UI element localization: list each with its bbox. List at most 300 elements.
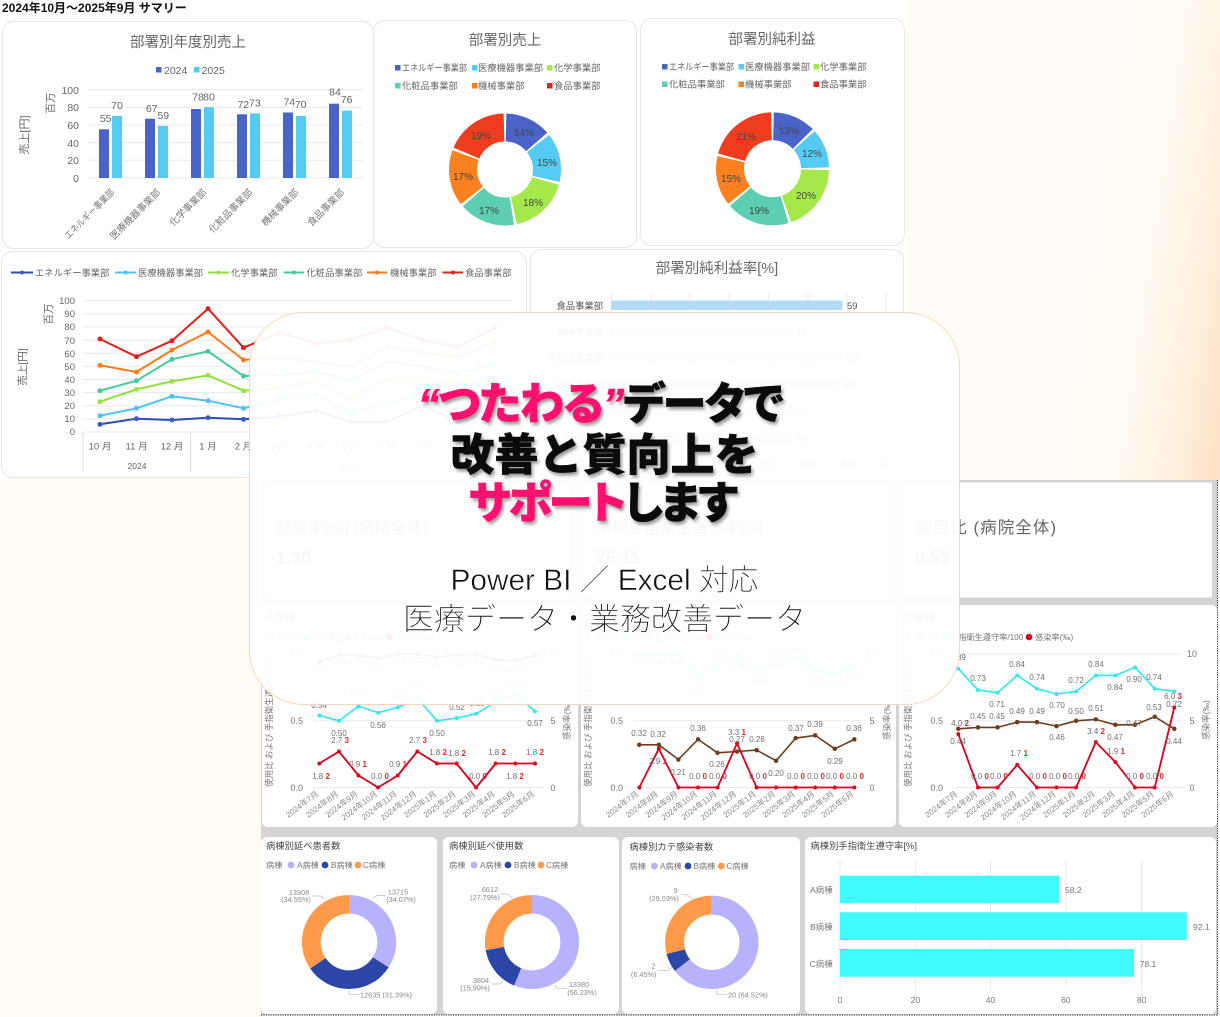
data labels: ward B: 0.0 0 xyxy=(749,772,767,781)
category labels: 化粧品事業部 xyxy=(206,186,255,235)
legend: ward C: 使用比 xyxy=(916,632,941,642)
gridlines and axis labels xyxy=(16,296,513,472)
x axis labels xyxy=(609,459,891,470)
gridlines and axis labels: 100 xyxy=(61,85,79,97)
legend: years: 2024 xyxy=(164,65,188,77)
bar category labels: エネルギー事業部 xyxy=(538,432,603,443)
x labels: ward A: 2025年4月 xyxy=(460,789,497,820)
data labels: ward B: 0.78 xyxy=(729,663,745,672)
data labels: ward B: 0.0 0 xyxy=(826,772,844,781)
data labels: ward B: 0.91 xyxy=(710,653,726,662)
bar value labels: 59 xyxy=(847,301,858,312)
x labels: ward C: 2025年6月 xyxy=(1139,789,1176,820)
heading: net profit rate: 部署別純利益率[%] xyxy=(656,260,778,277)
x labels: ward A: 2024年12月 xyxy=(378,789,419,822)
data labels: ward B: 0.20 xyxy=(768,769,784,778)
bar values: 73 xyxy=(249,98,261,110)
background: peach gradient top-right xyxy=(906,0,1220,480)
axes: ward A: 1.0 xyxy=(290,649,303,659)
month and year labels xyxy=(89,442,503,471)
x labels: ward B: 2025年2月 xyxy=(741,789,777,820)
data labels: ward A: 0.9 1 xyxy=(349,760,367,769)
donut percent labels: profit: 12% xyxy=(802,149,822,160)
bar value labels: 58 xyxy=(843,380,854,391)
legend: line series: 機械事業部 xyxy=(390,267,436,278)
data labels: ward C: 0.84 xyxy=(1088,660,1104,669)
donut percent labels: sales: 15% xyxy=(537,158,557,169)
data labels: ward B: 0.32 xyxy=(650,730,666,739)
legend: wards: C病棟 xyxy=(726,861,749,871)
x labels: ward A: 2024年9月 xyxy=(323,789,360,820)
category labels xyxy=(62,186,347,242)
data labels: ward B: 0.36 xyxy=(690,724,706,733)
donut percent labels: sales: 17% xyxy=(453,172,473,183)
x axis labels: 40 xyxy=(986,995,995,1005)
data labels: ward A: 0.52 xyxy=(449,703,465,712)
donut percent labels: profit: 13% xyxy=(779,126,799,137)
legend: wards: A病棟 xyxy=(297,860,319,870)
data labels: ward C: 0.0 0 xyxy=(971,772,989,781)
legend: ward A: 感染率(‰) xyxy=(396,632,434,642)
donut percent labels: profit: 20% xyxy=(796,191,816,202)
axes: ward C: 5 xyxy=(1189,716,1195,726)
panel: yearly sales bar chart xyxy=(2,22,374,248)
category labels: 医療機器事業部 xyxy=(108,186,163,242)
x labels: ward A: 2025年6月 xyxy=(500,789,536,820)
heading: usage days: 病棟別延べ使用数 xyxy=(449,840,523,851)
heading: ward C: C病棟 xyxy=(905,610,935,624)
data labels: ward A: 0.95 xyxy=(488,666,504,675)
bar labels: B病棟 xyxy=(810,922,833,932)
axes: ward B: 1.0 xyxy=(610,649,623,659)
data labels: ward C: 0.73 xyxy=(970,674,986,683)
x labels: ward A: 2024年8月 xyxy=(304,789,340,820)
data labels: ward C: 1.7 1 xyxy=(1010,749,1028,758)
data labels: ward B: 0.93 xyxy=(631,657,647,666)
data labels: ward C: 0.0 0 xyxy=(1049,772,1067,781)
x labels: ward B: 2024年11月 xyxy=(679,789,719,822)
legend: departments xyxy=(662,61,866,90)
data labels: ward B: 0.91 xyxy=(768,653,784,662)
x axis labels: 20 xyxy=(685,459,695,470)
axes: ward B xyxy=(583,649,892,793)
bar values: 76 xyxy=(341,94,353,106)
bar value labels xyxy=(792,301,859,444)
gridlines and axis labels: 70 xyxy=(64,336,75,347)
legend: ward B: 使用比 xyxy=(596,632,621,642)
chart card: ward B xyxy=(581,605,896,827)
donut percent labels: profit: 21% xyxy=(736,132,756,143)
data labels: ward A: 0.70 xyxy=(507,679,523,688)
x labels: ward B: 2025年3月 xyxy=(760,789,797,820)
gridlines and axis labels xyxy=(18,85,363,185)
KPI card: usage ratio xyxy=(905,482,1212,598)
data labels: usage days: 13380 xyxy=(569,980,589,989)
data labels: catheter infections: 9 xyxy=(673,886,678,895)
legend: departments: エネルギー事業部 xyxy=(402,62,467,73)
bars xyxy=(99,104,352,178)
data labels: ward B: 0.82 xyxy=(690,685,706,694)
data labels: ward B: 0.72 xyxy=(749,676,765,685)
gridlines and axis labels: 40 xyxy=(67,138,79,150)
data labels: ward B: 0.39 xyxy=(807,720,823,729)
bar value labels: 45 xyxy=(792,406,803,417)
data labels: ward C: 0.84 xyxy=(1009,660,1025,669)
data labels: ward C: 0.51 xyxy=(1088,704,1104,713)
data labels: ward A: 1.8 2 xyxy=(526,748,544,757)
x labels: ward B: 2025年5月 xyxy=(799,789,836,820)
category labels: エネルギー事業部 xyxy=(62,186,117,242)
bar category labels: 機械事業部 xyxy=(556,326,603,337)
axes: ward C: 使用比 および 手指衛生遵守率/100 xyxy=(903,655,913,787)
x labels: ward B: 2024年12月 xyxy=(698,789,738,822)
gridlines and axis labels: 20 xyxy=(64,401,75,412)
gridlines and axis labels: 50 xyxy=(64,362,75,373)
data labels: ward A: 0.50 xyxy=(429,729,445,738)
data labels: ward C: 0.0 0 xyxy=(1146,772,1164,781)
donut card: catheter infections xyxy=(622,837,800,1014)
month and year labels: 8 月 xyxy=(449,442,467,452)
gridlines and axis labels: 80 xyxy=(64,322,75,333)
data labels: ward A: 0.60 xyxy=(390,692,406,701)
gridlines and axis labels: 10 xyxy=(64,414,75,425)
data labels: ward B: 0.21 xyxy=(670,768,686,777)
legend: departments: 食品事業部 xyxy=(554,80,600,91)
legend: ward A: 手指衛生遵守率/100 xyxy=(311,632,385,642)
data labels: ward B: 3.3 1 xyxy=(728,728,746,737)
data labels: ward A: 0.64 xyxy=(488,687,504,696)
legend: departments: エネルギー事業部 xyxy=(669,61,734,72)
data labels: ward A: 0.67 xyxy=(410,682,426,691)
data labels: ward B: 0.0 0 xyxy=(689,772,707,781)
legend: ward B: 感染率(‰) xyxy=(715,632,753,642)
axes: ward C: 0 xyxy=(1189,783,1195,793)
heading: catheter infections: 病棟別カテ感染者数 xyxy=(630,841,713,852)
data labels: ward A: 1.8 2 xyxy=(506,772,524,781)
axes: ward A: 0.0 xyxy=(290,783,303,793)
axes: ward B: 0 xyxy=(869,783,875,793)
data labels: patient days: (34.55%) xyxy=(281,895,311,904)
legend: ward A: 使用比 xyxy=(277,632,302,642)
x labels: ward C: 2025年1月 xyxy=(1041,789,1077,820)
gridlines and axis labels: 20 xyxy=(67,155,79,167)
data labels: ward C: 0.49 xyxy=(1009,707,1025,716)
data labels: catheter infections xyxy=(631,886,768,1000)
bar value labels: 46 xyxy=(796,327,807,338)
legend: departments: 機械事業部 xyxy=(745,78,792,90)
donut: catheter infections xyxy=(675,905,749,980)
data labels: ward B: 0.27 xyxy=(729,735,745,744)
axes: ward A xyxy=(264,649,572,793)
legend: wards xyxy=(266,860,385,870)
bar values: 70 xyxy=(295,99,307,111)
axes: ward B: 感染率(‰) xyxy=(882,700,892,740)
axes: ward A: 5 xyxy=(550,716,556,726)
data labels: ward A: 0.57 xyxy=(527,719,543,728)
month and year labels: 7 月 xyxy=(414,442,432,452)
KPI card: infection rate: 1.30 xyxy=(276,548,311,568)
subtitle line 2: 医療データ・業務改善データ xyxy=(403,602,806,637)
legend: line series: 医療機器事業部 xyxy=(138,267,203,278)
x labels: ward B: 2024年9月 xyxy=(643,789,680,820)
x labels: ward B: 2024年8月 xyxy=(623,789,660,820)
data labels: ward B: 0.0 0 xyxy=(787,772,805,781)
data labels: patient days: 12635 (31.39%) xyxy=(360,990,412,1000)
category labels: 食品事業部 xyxy=(305,186,347,229)
axes: ward A: 0 xyxy=(550,783,556,793)
x labels: ward A: 2025年3月 xyxy=(441,789,477,820)
legend: wards: B病棟 xyxy=(514,860,536,870)
x axis labels: 60 xyxy=(1061,995,1071,1005)
x labels: ward A xyxy=(284,789,536,822)
bar value labels: 59 xyxy=(848,353,859,364)
x labels: ward C xyxy=(923,789,1176,822)
data labels: ward C: 0.45 xyxy=(970,712,986,721)
KPI card: usage ratio: 使用比 (病院全体) xyxy=(915,518,1056,537)
headline line 2: 改善と質向上を xyxy=(450,419,758,483)
lines: ward A xyxy=(319,654,535,788)
bar category labels: 化粧品事業部 xyxy=(547,352,603,363)
legend: wards: B病棟 xyxy=(331,860,353,870)
data labels: ward C: 0.49 xyxy=(1029,707,1045,716)
data labels: ward A: 1.8 2 xyxy=(448,749,466,758)
KPI card: hand hygiene: 平均手指衛生遵守率[%] xyxy=(596,519,763,537)
data labels: ward A: 0.9 1 xyxy=(389,760,407,769)
data labels: ward A: 0.0 0 xyxy=(371,772,389,781)
gridlines and axis labels: 0 xyxy=(73,173,79,185)
data labels: ward A: 0.98 xyxy=(350,658,366,667)
bar values: 72 xyxy=(237,99,249,111)
legend: ward B xyxy=(585,632,753,642)
KPI card: infection rate: 感染率[‰] (病院全体) xyxy=(276,519,428,537)
data labels: usage days: 3804 xyxy=(473,976,489,985)
x labels: ward B: 2025年1月 xyxy=(721,789,758,820)
data labels: ward C: 0.72 xyxy=(1068,676,1084,685)
month and year labels: 1 月 xyxy=(199,442,217,452)
data labels: ward C: 0.90 xyxy=(1126,675,1142,684)
bar labels xyxy=(810,885,1210,969)
data labels: patient days xyxy=(281,888,416,1000)
donut percent labels: sales xyxy=(453,128,557,217)
axes: ward C: 10 xyxy=(1187,649,1197,659)
heading: patient days: 病棟別延べ患者数 xyxy=(266,840,340,851)
data labels: ward B: 0.88 xyxy=(807,675,823,684)
x labels: ward A: 2024年11月 xyxy=(359,789,399,822)
data labels: ward B: 0.26 xyxy=(709,760,725,769)
line series xyxy=(100,309,495,424)
data labels: ward B: 0.0 0 xyxy=(807,772,825,781)
legend: wards: 病棟 xyxy=(266,860,282,870)
KPI card: usage ratio: 0.59 xyxy=(915,548,950,568)
donut: sales xyxy=(463,128,547,212)
data labels: ward A: 0.97 xyxy=(429,660,445,669)
data labels: ward C: 0.47 xyxy=(1126,719,1142,728)
data labels: ward B: 0.91 xyxy=(846,671,862,680)
month and year labels: 3 月 xyxy=(270,442,288,452)
data labels: ward B: 0.93 xyxy=(651,657,667,666)
x labels: ward C: 2025年5月 xyxy=(1119,789,1156,820)
gridlines and axis labels: 30 xyxy=(64,388,75,399)
x labels: ward B: 2024年7月 xyxy=(604,789,640,820)
month and year labels: 11 月 xyxy=(125,442,148,452)
legend: wards: B病棟 xyxy=(694,861,715,871)
x labels: ward C: 2025年2月 xyxy=(1060,789,1097,820)
data labels: ward A: 1.00 xyxy=(390,656,406,665)
bar values: 80 xyxy=(203,92,215,104)
x labels: ward A: 2025年2月 xyxy=(421,789,458,820)
bar values: 70 xyxy=(111,100,123,112)
data labels: ward B: 0.93 xyxy=(670,657,686,666)
data labels: ward A: 1.8 2 xyxy=(488,748,506,757)
data labels: ward A: 0.95 xyxy=(311,664,327,673)
legend: wards: C病棟 xyxy=(546,860,568,870)
legend: departments: 医療機器事業部 xyxy=(745,61,810,72)
KPI card: hand hygiene: 76.11 xyxy=(596,548,640,568)
data labels: ward B: 0.29 xyxy=(827,757,843,766)
data labels: ward A: 1.00 xyxy=(409,656,425,665)
axes: ward B: 10 xyxy=(867,649,877,659)
donut percent labels: sales: 14% xyxy=(514,128,534,139)
dashboard background xyxy=(261,480,1218,1015)
month and year labels: 5 月 xyxy=(342,442,359,452)
donut: profit xyxy=(730,126,815,211)
bar values: 78 xyxy=(192,92,204,104)
data labels: ward B: 0.0 0 xyxy=(709,772,727,781)
gridlines xyxy=(840,860,1142,990)
bar labels: 58.2 xyxy=(1065,885,1082,895)
data labels: ward A: 0.99 xyxy=(449,658,465,667)
data labels: ward A: 0.99 xyxy=(527,658,543,667)
data labels: ward B: 0.32 xyxy=(631,729,647,738)
gridlines and axis labels: 百万 xyxy=(43,304,55,324)
category labels: 化学事業部 xyxy=(167,186,209,229)
bar category labels: 医療機器事業部 xyxy=(538,405,603,416)
data labels: ward A: 0.55 xyxy=(469,699,485,708)
data labels: ward C: 0.84 xyxy=(1107,683,1123,692)
data labels: ward C: 0.0 0 xyxy=(990,772,1008,781)
panel: net profit rate bar chart xyxy=(530,250,904,478)
data labels: ward B: 0.36 xyxy=(846,724,862,733)
bar values: 67 xyxy=(146,103,158,115)
legend: departments: 食品事業部 xyxy=(820,78,866,90)
data labels: ward C: 0.44 xyxy=(950,737,966,746)
axes: ward B: 0.5 xyxy=(610,716,623,726)
legend: departments xyxy=(395,62,600,91)
data labels: ward A: 1.8 2 xyxy=(312,772,330,781)
subtitle line 1: Power BI ／ Excel 対応 xyxy=(450,564,758,597)
donut card: usage days xyxy=(443,837,619,1014)
legend: departments: 医療機器事業部 xyxy=(478,62,543,73)
data labels: ward C: 4.0 2 xyxy=(951,719,969,728)
KPI card: infection rate xyxy=(266,483,571,598)
data labels: ward C: 3.4 2 xyxy=(1087,727,1105,736)
data labels: ward C: 0.44 xyxy=(1166,737,1182,746)
bar labels: C病棟 xyxy=(810,959,833,969)
x labels: ward A: 2025年5月 xyxy=(480,789,517,820)
bar values xyxy=(100,86,353,125)
data labels: ward C: 0.72 xyxy=(1166,700,1182,709)
x labels: ward A: 2024年10月 xyxy=(339,789,379,822)
legend: wards: 病棟 xyxy=(630,861,646,871)
data labels: ward A: 0.99 xyxy=(468,657,484,666)
data labels: ward C: 0.89 xyxy=(950,653,966,662)
donut percent labels: sales: 18% xyxy=(523,198,543,209)
month and year labels: 6 月 xyxy=(378,442,396,452)
category labels: 機械事業部 xyxy=(259,186,301,229)
legend: departments: 化粧品事業部 xyxy=(669,78,725,90)
legend: line series: 化学事業部 xyxy=(231,267,278,278)
headline line 3: サポートします xyxy=(469,467,735,531)
bars xyxy=(840,876,1187,977)
axes: ward C: 0.5 xyxy=(930,716,943,726)
legend: departments: 化学事業部 xyxy=(820,61,866,72)
x axis labels: 0 xyxy=(609,459,614,470)
x labels: ward C: 2024年12月 xyxy=(1018,789,1058,822)
heading: ward B: B病棟 xyxy=(586,610,616,624)
x labels: ward C: 2024年9月 xyxy=(962,789,999,820)
bar values: 55 xyxy=(100,113,112,125)
axes: ward A: 0.5 xyxy=(290,716,303,726)
gridlines and axis labels: 100 xyxy=(59,296,75,307)
donut percent labels: profit xyxy=(721,126,822,217)
x labels: ward C: 2025年4月 xyxy=(1100,789,1136,820)
data labels: ward C: 0.0 0 xyxy=(1068,772,1086,781)
data labels: usage days xyxy=(460,885,597,997)
axes: ward C: 1.0 xyxy=(930,649,943,659)
lines: ward C xyxy=(958,667,1174,788)
legend: ward A xyxy=(266,632,434,642)
data labels: usage days: (56.23%) xyxy=(567,988,597,997)
x axis labels: 10 xyxy=(646,459,656,470)
x labels: ward C: 2025年3月 xyxy=(1080,789,1117,820)
axes: ward A: 使用比 および 手指衛生遵守率/100 xyxy=(264,655,274,787)
gridlines xyxy=(611,293,886,452)
month and year labels: 9 月 xyxy=(486,442,503,452)
heading: profit by department: 部署別純利益 xyxy=(728,31,816,48)
data labels: ward C: 0.0 0 xyxy=(1029,772,1047,781)
x labels: ward C: 2024年11月 xyxy=(998,789,1038,822)
legend: years: 2025 xyxy=(202,65,225,77)
x axis labels: 40 xyxy=(763,459,774,470)
data labels: ward C: 1.9 1 xyxy=(1107,747,1125,756)
data labels: usage days: (27.79%) xyxy=(470,893,500,902)
x labels: ward C: 2024年8月 xyxy=(943,789,979,820)
legend: line series: 化粧品事業部 xyxy=(306,267,362,278)
data labels: ward B: 0.0 0 xyxy=(846,772,864,781)
axes: ward C xyxy=(903,649,1211,793)
background: cream lower-left area xyxy=(0,478,262,1017)
data labels: ward B: 0.85 xyxy=(827,681,843,690)
data labels: ward A: 0.97 xyxy=(370,661,386,670)
x labels: ward A: 2024年7月 xyxy=(284,789,320,820)
data labels: patient days: 13908 xyxy=(289,888,309,897)
legend: departments: 化学事業部 xyxy=(554,62,600,73)
data labels: ward B: 0.37 xyxy=(788,724,804,733)
x labels: ward B: 2024年10月 xyxy=(659,789,699,822)
legend: wards: A病棟 xyxy=(480,860,502,870)
month and year labels: 4 月 xyxy=(307,442,325,452)
legend: line series: エネルギー事業部 xyxy=(35,267,109,278)
x labels: ward B xyxy=(604,789,856,822)
legend: wards xyxy=(630,861,749,871)
header text: 2024年10月～2025年9月 サマリー xyxy=(2,0,187,15)
axes: ward B: 5 xyxy=(869,716,875,726)
x axis labels: 30 xyxy=(724,459,734,470)
data labels: ward A: 0.56 xyxy=(370,721,386,730)
month and year labels: 2024 xyxy=(128,461,147,471)
gridlines and axis labels: 0 xyxy=(70,427,75,438)
heading: ward A: A病棟 xyxy=(266,610,296,624)
